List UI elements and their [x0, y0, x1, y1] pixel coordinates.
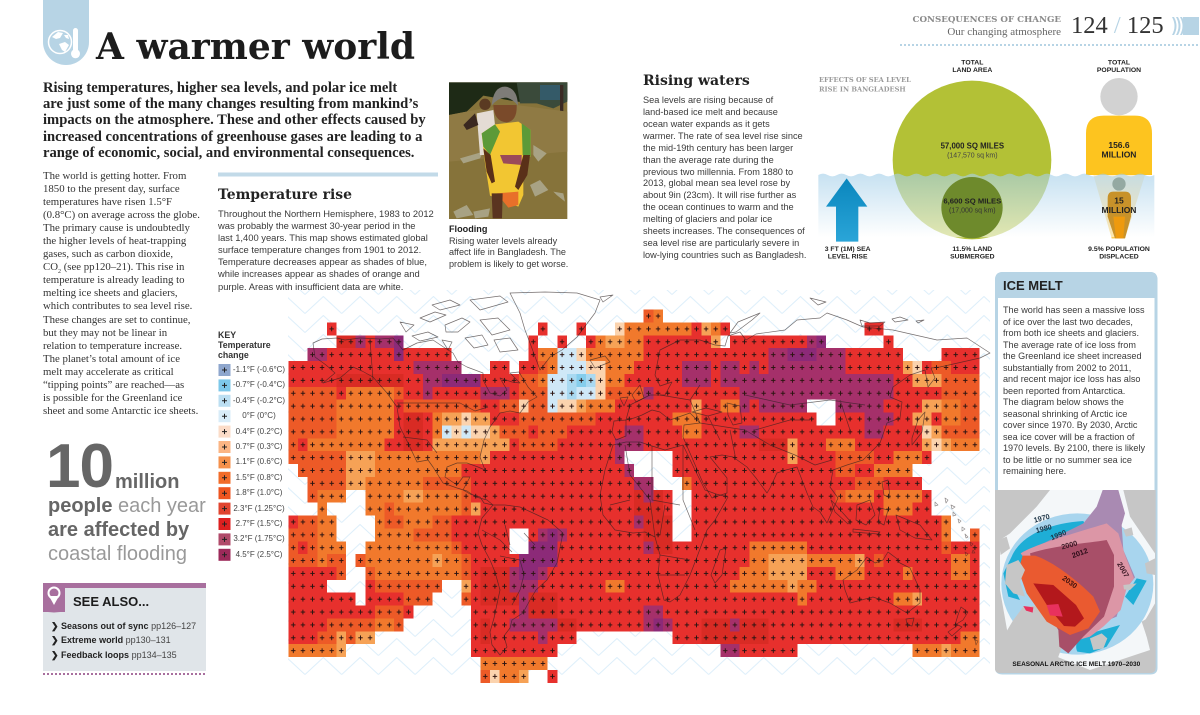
text block: rising waters: the mid-19th century has been larger — [643, 143, 793, 153]
text block: rising waters: melting of glaciers and polar ice — [643, 214, 772, 224]
callout text: coastal flooding — [48, 543, 187, 565]
legend labels: 0.4°F (0.2°C) — [236, 427, 282, 436]
legend title: Temperature — [218, 340, 271, 350]
legend labels: 0.7°F (0.3°C) — [236, 442, 282, 451]
submerged land circle — [941, 177, 1003, 238]
icon: globe and thermometer — [48, 28, 80, 58]
million: million — [115, 471, 179, 493]
heading: rising waters: Rising waters — [643, 73, 750, 89]
text block: world is getting hotter: melting ice sheets and glaciers, — [43, 287, 178, 299]
text block: world is getting hotter: These changes are set to continue, — [43, 314, 190, 326]
intro paragraph: impacts on the atmosphere. These and other effects caused by — [43, 112, 426, 128]
text block: ice melt: 1970 levels. By 2100, there is likely — [1003, 443, 1145, 453]
legend title — [218, 330, 271, 360]
text block: ice melt: The average rate of ice loss from — [1003, 340, 1136, 350]
labels: (17,000 sq km) — [949, 208, 996, 215]
text block: world is getting hotter: sheet and some Antarctic ice sheets. — [43, 405, 198, 417]
legend labels: -1.1°F (-0.6°C) — [233, 365, 285, 374]
background chevron pattern — [288, 290, 990, 676]
legend title: KEY — [218, 330, 236, 340]
legend labels — [233, 365, 285, 559]
see also rule — [43, 673, 206, 675]
callout text: people each year — [48, 495, 206, 517]
arctic channel pink — [1023, 604, 1063, 617]
year labels: 2000 — [1060, 538, 1078, 551]
2030 extent — [1018, 556, 1100, 635]
rule above temperature rise — [218, 172, 438, 176]
legend labels: 0°F (0°C) — [242, 411, 276, 420]
text block: temperature rise: surface temperature changes from 1901 to 2012. — [218, 244, 421, 255]
intro paragraph: Rising temperatures, higher sea levels, and polar ice melt — [43, 80, 397, 96]
see also links: ❯ Feedback loops pp134–135 — [51, 650, 177, 660]
text block: rising waters: sheets increases. The consequences of — [643, 226, 805, 236]
labels: 6,600 SQ MILES — [943, 196, 1001, 205]
caption: flooding: affect life in Bangladesh. The — [449, 247, 566, 257]
see also links: ❯ Extreme world pp130–131 — [51, 635, 171, 645]
text block: ice melt: to be little or no summer sea ice — [1003, 454, 1132, 464]
legend labels: 3.2°F (1.75°C) — [233, 534, 285, 543]
panel: see also — [51, 594, 196, 660]
text block: world is getting hotter: The primary cause is undoubtedly — [43, 222, 190, 234]
panel: ice melt frame — [995, 272, 1158, 673]
land area circle — [893, 81, 1051, 239]
labels: TOTAL — [1108, 59, 1130, 66]
text block: rising waters: 2013, global mean sea level rose by — [643, 178, 790, 188]
land: canada coast — [995, 605, 1070, 673]
text block: rising waters: low-lying countries such as Bangladesh. — [643, 250, 806, 260]
text block: ice melt — [1003, 305, 1145, 476]
text block: world is getting hotter: (0.8°C) on average across the globe. — [43, 209, 200, 221]
displaced population figure — [1108, 177, 1131, 238]
intro paragraph: increased concentrations of greenhouse gases are leading to a — [43, 129, 422, 145]
labels: DISPLACED — [1099, 254, 1139, 261]
intro paragraph: range of economic, social, and environmental consequences. — [43, 145, 414, 161]
labels: 3 FT (1M) SEA — [825, 246, 871, 253]
legend labels: 1.1°F (0.6°C) — [236, 457, 282, 466]
text block: world is getting hotter: is possible for the Greenland ice — [43, 392, 182, 404]
callout: 10 million — [46, 432, 206, 565]
water band — [818, 174, 1154, 237]
legend labels: 2.7°F (1.5°C) — [236, 519, 282, 528]
2012 extent — [1030, 540, 1114, 653]
legend title: change — [218, 350, 249, 360]
icon: rising arrow — [826, 178, 867, 242]
callout text: are affected by — [48, 519, 189, 541]
1970 extent — [1001, 513, 1153, 655]
labels: (147,570 sq km) — [947, 153, 998, 160]
text block: world is getting hotter: temperatures have risen 1.5°F — [43, 196, 172, 208]
labels: MILLION — [1102, 205, 1136, 215]
legend labels: -0.4°F (-0.2°C) — [233, 396, 285, 405]
labels: POPULATION — [1097, 67, 1141, 74]
big number: 10 — [46, 432, 113, 500]
text block: ice melt: and recent major ice loss has also — [1003, 374, 1140, 384]
running head — [912, 15, 1061, 38]
caption: flooding: Rising water levels already — [449, 236, 557, 246]
header tab: page marker — [1172, 17, 1199, 35]
text block: world is getting hotter: gases, such as carbon dioxide, — [43, 248, 173, 260]
year labels: 2030 — [1061, 574, 1079, 590]
text block: rising waters: the ocean continues to warm and the — [643, 202, 794, 212]
text block: world is getting hotter: The world is getting hotter. From — [43, 170, 186, 182]
text block: ice melt: substantially from 2002 to 2011, — [1003, 362, 1131, 372]
see also links — [51, 620, 196, 660]
text block: world is getting hotter: but they may not be linear in — [43, 327, 167, 339]
open ocean — [1000, 490, 1155, 670]
text block: rising waters: previous two millennia. From 1880 to — [643, 167, 793, 177]
icon: pin on see also tab — [43, 583, 206, 671]
temperature grid cells — [288, 310, 980, 683]
infographic heading: RISE IN BANGLADESH — [819, 85, 906, 93]
see also links: ❯ Seasons out of sync pp126–127 — [51, 620, 196, 630]
year labels: 1990 — [1049, 528, 1068, 542]
permanent core ice — [1033, 583, 1084, 627]
legend — [218, 330, 285, 559]
text block: temperature rise: purple. Areas with insufficient data are white. — [218, 281, 403, 292]
labels: 57,000 SQ MILES — [941, 141, 1004, 150]
text block: world is getting hotter: The planet’s total amount of ice — [43, 353, 180, 365]
year labels — [1033, 512, 1131, 590]
text block: ice melt: from both ice sheets and glaciers. — [1003, 328, 1139, 338]
text block: ice melt: been reported from Antarctica. — [1003, 386, 1125, 396]
text block: rising waters: warmer. The rate of sea level rise since — [643, 131, 803, 141]
year labels: 2012 — [1071, 546, 1089, 560]
title tab with icon — [43, 0, 89, 65]
legend labels: 4.5°F (2.5°C) — [236, 550, 282, 559]
year labels: 1970 — [1033, 512, 1051, 525]
text block: world is getting hotter — [43, 170, 200, 417]
labels: SUBMERGED — [950, 254, 995, 261]
text block: world is getting hotter: which contributes to sea level rise. — [43, 300, 192, 312]
1990 extent — [1040, 490, 1135, 623]
labels: TOTAL — [961, 59, 983, 66]
labels: LAND AREA — [952, 67, 992, 74]
text block: ice melt: remaining here. — [1003, 466, 1066, 476]
year labels: 1980 — [1035, 522, 1053, 535]
text block: temperature rise: last 1,400 years. This map shows estimated global — [218, 232, 428, 243]
text block: world is getting hotter: CO2 (see pp120–21). This rise in — [43, 261, 184, 275]
text block: ice melt: The diagram below shows the — [1003, 397, 1124, 407]
labels: MILLION — [1102, 150, 1136, 160]
intro paragraph: are just some of the many changes resulting from mankind’s — [43, 96, 418, 112]
text block: temperature rise: Temperature decreases appear as shades of blue, — [218, 256, 427, 267]
legend swatches — [218, 364, 230, 561]
text block: temperature rise: was probably the warmest 30-year period in the — [218, 220, 416, 231]
world temperature map — [288, 292, 990, 683]
labels — [825, 59, 1150, 261]
labels: 9.5% POPULATION — [1088, 246, 1150, 253]
caption: flooding — [449, 224, 568, 269]
text block: world is getting hotter: relation to temperature increase. — [43, 340, 182, 352]
heading: ice melt: ICE MELT — [1003, 278, 1063, 293]
text block: ice melt: seasonal shrinking of Arctic ice — [1003, 408, 1127, 418]
text block: rising waters: about 9in (23cm). It will rise further as — [643, 190, 796, 200]
text block: ice melt: sea ice cover will be a fraction of — [1003, 432, 1134, 442]
intro paragraph — [43, 80, 426, 161]
1980 extent — [1003, 521, 1147, 653]
person: total population — [1086, 78, 1152, 238]
text block: world is getting hotter: melt may accelerate as critical — [43, 366, 174, 378]
text block: temperature rise — [218, 208, 434, 292]
infographic heading: EFFECTS OF SEA LEVEL — [819, 76, 911, 84]
running head: Our changing atmosphere — [947, 26, 1061, 38]
legend labels: 1.8°F (1.0°C) — [236, 488, 282, 497]
infographic: sea level effects in Bangladesh — [818, 59, 1154, 261]
figure: woman in yellow sari — [482, 87, 531, 218]
text block: temperature rise: while increases appear as shades of orange and — [218, 268, 420, 279]
caption: flooding: Flooding — [449, 224, 487, 234]
running head: CONSEQUENCES OF CHANGE — [913, 15, 1061, 25]
figure: man behind — [463, 99, 498, 155]
2000 and 2007 extent — [1021, 523, 1134, 640]
text block: ice melt: The world has seen a massive loss — [1003, 305, 1145, 315]
text block: rising waters: land-based ice melt and because — [643, 107, 778, 117]
text block: world is getting hotter: 1850 to the present day, surface — [43, 183, 180, 195]
text block: world is getting hotter: “tipping points” are reached—as — [43, 379, 184, 391]
legend labels: 1.5°F (0.8°C) — [236, 473, 282, 482]
map caption: SEASONAL ARCTIC ICE MELT 1970–2030 — [1012, 661, 1141, 668]
labels: 156.6 — [1108, 140, 1130, 150]
text block: ice melt: of ice over the last two decades, — [1003, 316, 1133, 326]
text block: rising waters — [643, 95, 806, 260]
continent outlines — [313, 292, 990, 655]
labels: 11.5% LAND — [952, 246, 992, 253]
year labels: 2007 — [1115, 560, 1131, 579]
labels: 15 — [1114, 195, 1124, 205]
text block: rising waters: than the average rate during the — [643, 155, 774, 165]
text block: ice melt: the Greenland ice sheet increased — [1003, 351, 1142, 361]
callout text — [48, 495, 206, 565]
text block: world is getting hotter: temperature is already leading to — [43, 274, 184, 286]
chart: seasonal arctic ice melt map — [995, 490, 1156, 673]
text block: ice melt: cover since 1970. By 2030, Arctic — [1003, 420, 1137, 430]
labels: LEVEL RISE — [828, 254, 868, 261]
caption: flooding: problem is likely to get worse. — [449, 259, 568, 269]
text block: world is getting hotter: the higher levels of heat-trapping — [43, 235, 186, 247]
text block: rising waters: sea level rise are particularly severe in — [643, 238, 799, 248]
text block: rising waters: Sea levels are rising because of — [643, 95, 773, 105]
text block: rising waters: ocean water expands as it gets — [643, 119, 770, 129]
text block: temperature rise: Throughout the Northern Hemisphere, 1983 to 2012 — [218, 208, 434, 219]
photo: woman wading through flood water — [449, 82, 567, 219]
title: A warmer world — [96, 26, 415, 68]
legend labels: 2.3°F (1.25°C) — [233, 504, 285, 513]
heading: temperature rise: Temperature rise — [218, 187, 352, 203]
land: islands — [998, 527, 1155, 650]
legend labels: -0.7°F (-0.4°C) — [233, 380, 285, 389]
page numbers: 124 / 125 — [1071, 12, 1164, 39]
dotted rule top right — [900, 44, 1199, 46]
see also heading: SEE ALSO... — [73, 594, 149, 609]
